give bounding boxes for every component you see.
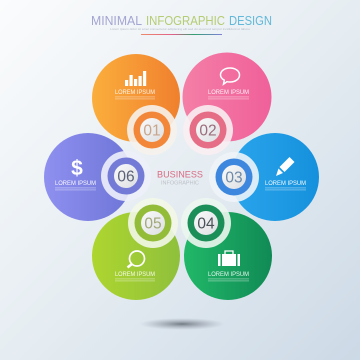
icon: magnifier — [128, 251, 144, 268]
title rule — [141, 34, 222, 35]
body text lines — [55, 188, 96, 190]
panel 01 orange — [92, 54, 180, 142]
badge 04: 04 — [197, 216, 215, 232]
badge 04 — [181, 198, 231, 248]
floor shadow — [139, 318, 225, 330]
title: MINIMAL — [91, 13, 142, 28]
label: LOREM IPSUM — [55, 180, 96, 187]
body text lines — [115, 278, 155, 281]
panel 03 blue — [231, 133, 319, 221]
badge 06 — [101, 151, 151, 201]
icon: speech bubble — [220, 68, 240, 84]
title: INFOGRAPHIC — [146, 13, 225, 28]
badge 06: 06 — [117, 168, 135, 186]
icon: pencil — [276, 157, 294, 176]
panel 05 lime — [92, 212, 180, 300]
badge 02 — [183, 105, 233, 155]
body text lines — [265, 188, 306, 190]
body text lines — [115, 96, 155, 99]
badge 01 — [127, 105, 177, 155]
center label — [157, 170, 203, 186]
label: LOREM IPSUM — [115, 89, 155, 96]
badge 03: 03 — [225, 170, 243, 186]
badge 02: 02 — [199, 122, 217, 140]
center label: BUSINESS — [157, 170, 203, 180]
subtitle: Lorem ipsum dolor sit amet consectetur adipiscing elit sed do eiusmod tempor incididunt ut labore — [110, 28, 251, 31]
badge 05 — [128, 198, 178, 248]
badge 05: 05 — [144, 216, 162, 232]
badge 03 — [209, 152, 259, 202]
panel 02 pink — [182, 52, 272, 142]
body text lines — [208, 278, 249, 281]
body text lines — [208, 96, 249, 99]
title: DESIGN — [229, 13, 272, 28]
title — [91, 13, 272, 28]
icon: briefcase — [218, 251, 240, 266]
badge 01: 01 — [143, 122, 161, 140]
label: LOREM IPSUM — [208, 271, 249, 278]
label: LOREM IPSUM — [265, 180, 306, 187]
icon: bar chart — [125, 71, 146, 86]
icon: dollar: $ — [71, 157, 83, 180]
panel 06 purple — [44, 133, 132, 221]
center label: INFOGRAPHIC — [161, 180, 199, 186]
label: LOREM IPSUM — [208, 89, 249, 96]
panel 04 green — [184, 212, 272, 300]
label: LOREM IPSUM — [115, 271, 155, 278]
